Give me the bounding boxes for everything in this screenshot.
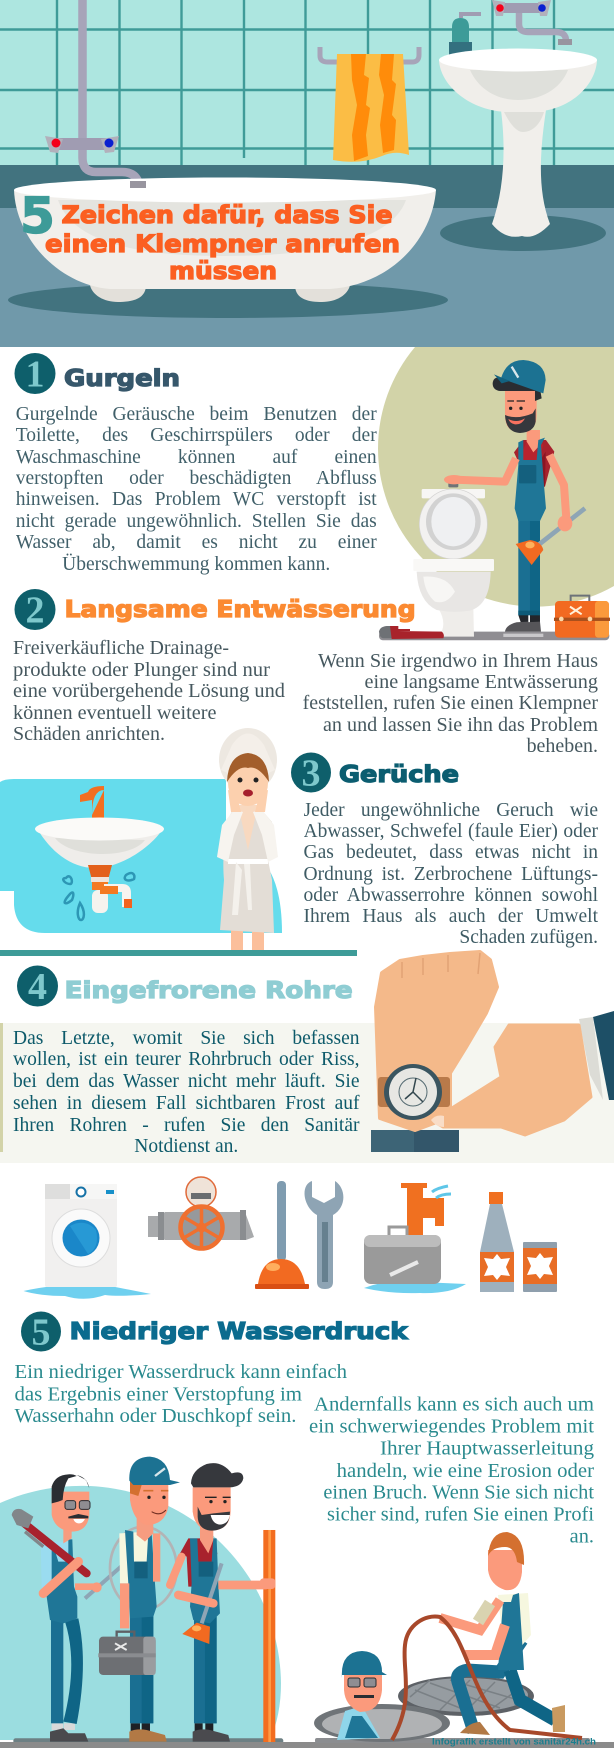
kneeling plumber [392,1532,582,1740]
section 1 [14,353,377,579]
title [20,187,400,285]
text block: left column: Schäden anrichten. [13,724,165,745]
panel: bathroom header [0,0,614,347]
text block: left column: Ein niedriger Wasserdruck kann einfach [14,1362,347,1383]
icon: toolbox with pipe [364,1183,466,1293]
cyan background shape [0,779,282,933]
icon: pipe valve with gauge [148,1177,254,1250]
text block: Gurgeln: Überschwemmung kommen kann. [62,554,330,575]
plumber figures [12,1457,283,1744]
text block: Gerüche: Ordnung ist. Zerbrochene Lüftungs- [304,864,598,885]
illustration: plumber, toilet and tools [379,360,610,640]
title: einen Klempner anrufen [45,230,400,258]
toilet [413,482,494,637]
credit line: Infografik erstellt von sanitar24h.ch [432,1736,596,1748]
pipe wrench [379,626,444,639]
text block: Gerüche [304,800,598,952]
plunger stick and cup [538,508,585,545]
text block: Gerüche: Abwasser, Schwefel (faule Eier) oder [304,821,598,842]
section 4 [13,966,360,1162]
number badge 3: 3 [302,752,320,794]
text block: right column: handeln, wie eine Erosion oder [337,1461,595,1482]
icon: bathtub [8,178,448,318]
number badge 4: 4 [28,966,47,1008]
number badge 2: 2 [26,590,44,632]
text block: Eingefrorene Rohre: Das Letzte, womit Sie sich befassen [13,1028,360,1048]
teal bar [0,950,357,956]
number badge 2 [14,589,56,632]
text block: Gerüche: Jeder ungewöhnliche Geruch wie [304,800,598,821]
text block: Gurgeln: Toilette, des Geschirrspülers oder der [16,425,377,446]
light teal background circle [0,1486,281,1740]
text block: Gurgeln: nicht gerade ungewöhnlich. Stellen Sie das [16,511,377,532]
text block: left column: eine vorübergehende Lösung und [13,681,285,702]
heading: Gerüche: Gerüche [339,762,459,788]
icon: shower pipe and valves [45,0,146,188]
open manhole [314,1704,450,1742]
text block: Gurgeln [16,404,377,579]
text block: left column: Freiverkäufliche Drainage- [13,638,229,659]
panel: section 4 background [0,1023,614,1163]
icon: washing machine [24,1184,151,1299]
number badge 1 [14,353,56,396]
gray toolbox [98,1632,156,1675]
text block: right column: an und lassen Sie ihn das Problem [323,715,598,736]
arm [453,458,516,482]
text block: left column: können eventuell weitere [13,703,217,724]
manhole cover [398,1676,534,1716]
text block: Eingefrorene Rohre: Notdienst an. [134,1136,238,1157]
icon: basin tap [492,0,572,45]
title: 5 [20,187,55,245]
watch [378,1064,450,1120]
number badge 1: 1 [26,354,44,396]
illustration: plumbers at manhole [0,1532,614,1748]
number badge 4 [17,966,58,1008]
text block: right column: einen Bruch. Wenn Sie sich nicht [323,1483,595,1504]
title: müssen [169,257,277,285]
text block: left column: das Ergebnis einer Verstopfung im [14,1384,302,1406]
icon: wash basin [439,48,606,251]
icon: towel rail and towel [320,47,419,162]
text block: Gurgeln: Waschmaschine können auf einen [16,447,377,468]
plumber with coil and toolbox [98,1457,180,1742]
text block: Gerüche: Schaden zufügen. [459,927,598,948]
text block: Gurgeln: Wasser ab, damit es nicht zu einer [16,532,377,553]
text block: right column [309,1394,595,1548]
text block: Gurgeln: hinweisen. Das Problem WC verstopft ist [16,489,377,510]
text block: Eingefrorene Rohre: sehen in diesem Fall sichtbaren Frost auf [13,1093,360,1114]
text block: Gerüche: oder Abwasserrohre können sowohl [304,885,598,906]
text block: left column [14,1362,347,1427]
text block: Eingefrorene Rohre: wollen, ist ein teurer Rohrbruch oder Riss, [13,1049,360,1070]
illustration: woman in bathrobe [217,728,278,950]
panel: plumber illustration with toilet [378,347,614,640]
number badge 3 [291,752,331,794]
text block: right column [303,651,599,757]
text block: Gerüche: Ihrem Haus als auch der Umwelt [304,906,598,927]
icon: chemical bottle and can [480,1192,557,1292]
section 2 [13,589,599,757]
text block: right column: beheben. [527,736,598,757]
plumber with plunger and pipe [170,1463,275,1743]
plumber in manhole [337,1651,387,1740]
text block: left column [13,638,285,745]
number badge 5: 5 [32,1312,50,1354]
text block: right column: feststellen, rufen Sie einen Klempner [303,693,599,714]
plumber [444,360,585,632]
text block: Gerüche: Gas bedeutet, dass etwas nicht in [304,842,598,863]
heading: Eingefrorene Rohre: Eingefrorene Rohre [65,978,353,1004]
plumber with pipe wrench [12,1474,127,1742]
text block: right column: sicher sind, rufen Sie einen Profi [327,1505,595,1526]
heading: Gurgeln: Gurgeln [64,366,180,392]
heading: Langsame Entwässerung: Langsame Entwässerung [65,597,416,623]
text block: Eingefrorene Rohre: bei dem das Wasser nicht mehr läuft. Sie [13,1071,360,1092]
text block: left column: Wasserhahn oder Duschkopf sein. [14,1406,296,1427]
icon: wrench [305,1181,343,1289]
toolbox [554,596,610,638]
text block: Eingefrorene Rohre [13,1028,360,1162]
section 3 [291,752,598,952]
heading: Niedriger Wasserdruck: Niedriger Wasserdruck [70,1319,408,1345]
text block: right column: ein schwerwiegendes Problem mit [309,1417,595,1438]
text block: Gurgeln: verstopften oder beschädigten Abfluss [16,468,377,489]
text block: right column: eine langsame Entwässerung [364,672,598,693]
icon: leaking sink [35,786,164,920]
panel: leaking sink and worried woman [0,728,357,956]
text block: Gurgeln: Gurgelnde Geräusche beim Benutzen der [16,404,377,425]
text block: right column: Wenn Sie irgendwo in Ihrem Haus [318,651,598,672]
title: Zeichen dafür, dass Sie [62,201,392,229]
icon: plunger [255,1181,309,1289]
icon row: tools [24,1177,557,1299]
olive background circle [378,347,614,607]
illustration: hand with wristwatch [371,952,614,1152]
number badge 5 [21,1312,61,1354]
text block: right column: Ihrer Hauptwasserleitung [380,1439,594,1460]
text block: right column: an. [570,1526,594,1548]
section 5 [14,1312,595,1548]
text block: Eingefrorene Rohre: Ihren Rohren - rufen Sie den Sanitär [13,1115,360,1136]
icon: soap dispenser [449,12,481,55]
text block: left column: produkte oder Plunger sind nur [13,660,271,681]
text block: right column: Andernfalls kann es sich auch um [314,1394,594,1416]
illustration: three plumbers [0,1457,283,1744]
